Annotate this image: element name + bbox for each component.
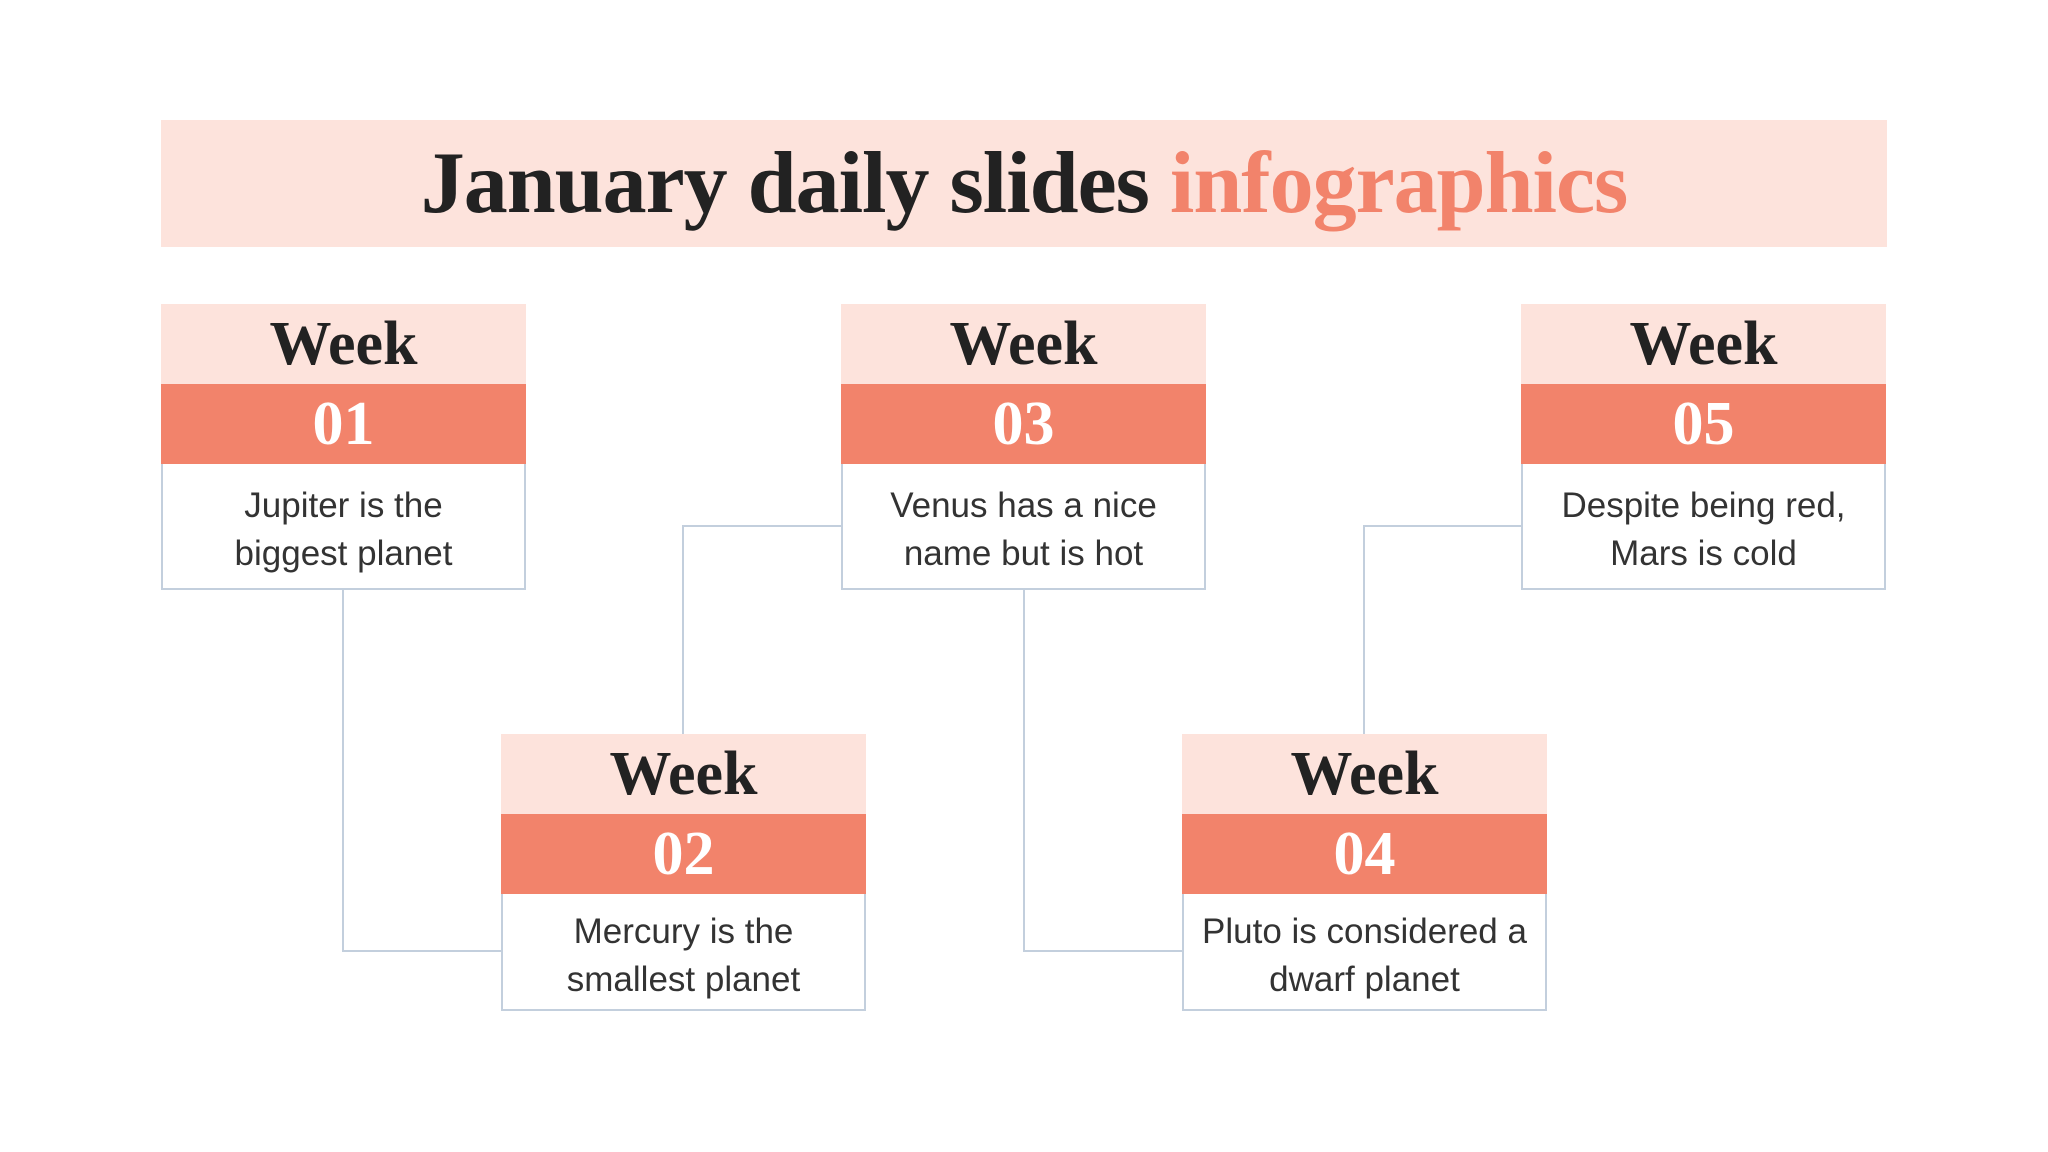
card: week 05: Despite being red, (1561, 486, 1846, 525)
card: week 01: Week (269, 310, 418, 378)
card: week 01 (161, 304, 526, 590)
card: week 02: smallest planet (567, 960, 800, 998)
title: January daily slides (421, 135, 1149, 232)
card: week 04: 04 (1334, 820, 1396, 888)
card: week 02: Week (609, 740, 758, 808)
card: week 02: 02 (652, 820, 714, 888)
card: week 05 (1521, 304, 1886, 590)
card: week 04 (1182, 734, 1547, 1011)
title: infographics (1170, 135, 1627, 232)
card: week 03: name but is hot (904, 534, 1143, 573)
card: week 05: Week (1629, 310, 1778, 378)
card: week 01: biggest planet (235, 534, 452, 573)
card: week 04: Pluto is considered a (1202, 912, 1527, 950)
card: week 04: dwarf planet (1269, 960, 1460, 998)
title (161, 120, 1887, 247)
card: week 01: Jupiter is the (244, 486, 443, 525)
card: week 03 (841, 304, 1206, 590)
card: week 04: Week (1290, 740, 1439, 808)
card: week 01: 01 (312, 390, 374, 458)
card: week 02 (501, 734, 866, 1011)
card: week 03: 03 (992, 390, 1054, 458)
card: week 05: 05 (1672, 390, 1734, 458)
card: week 03: Venus has a nice (890, 486, 1157, 525)
card: week 05: Mars is cold (1610, 534, 1797, 573)
card: week 03: Week (949, 310, 1098, 378)
card: week 02: Mercury is the (574, 912, 793, 950)
